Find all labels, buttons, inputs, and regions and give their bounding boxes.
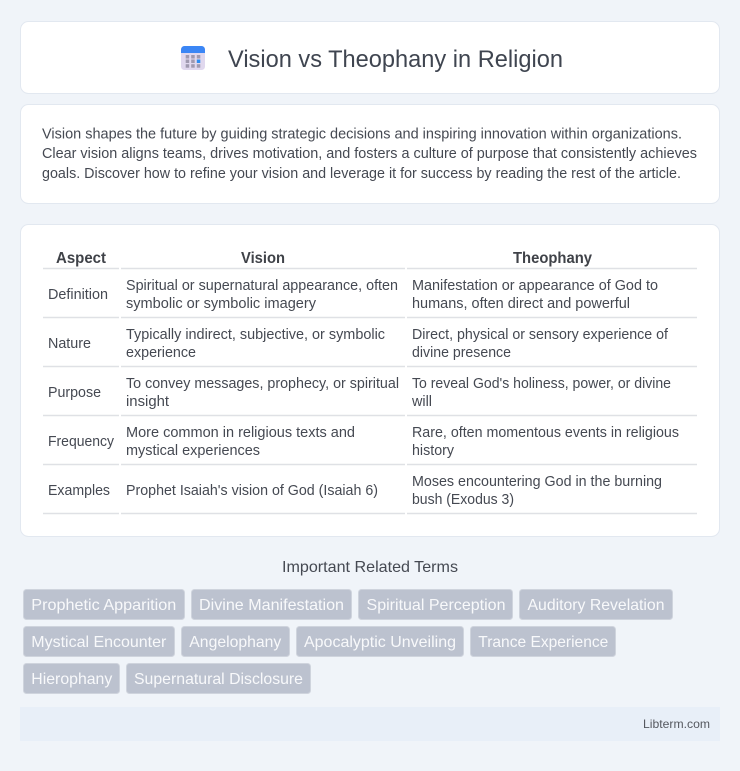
tag: Auditory Revelation xyxy=(520,590,672,620)
panel: introduction text: Clear vision aligns teams, drives motivation, and fosters a culture of purpose that consistently achieves xyxy=(42,146,697,162)
tag: Mystical Encounter xyxy=(24,626,174,656)
row: frequency: Frequency xyxy=(48,434,115,450)
table header row: Aspect xyxy=(56,250,106,267)
row: nature: divine presence xyxy=(412,345,511,361)
tag: Divine Manifestation xyxy=(192,590,352,620)
panel: introduction text: goals. Discover how to refine your vision and leverage it for success by reading the rest of the article. xyxy=(42,166,681,182)
tag: Apocalyptic Unveiling: Apocalyptic Unveiling xyxy=(304,634,456,651)
tag: Hierophany xyxy=(24,664,120,694)
tag: Angelophany xyxy=(182,626,290,656)
title: Vision vs Theophany in Religion xyxy=(228,46,563,73)
heading: important related terms: Important Related Terms xyxy=(282,559,458,576)
row: nature xyxy=(48,327,669,361)
row: definition: symbolic or symbolic imagery xyxy=(126,296,317,312)
row: frequency: mystical experiences xyxy=(126,443,260,459)
row: purpose xyxy=(48,376,671,410)
row: purpose: Purpose xyxy=(48,385,101,401)
row: purpose: To reveal God's holiness, power, or divine xyxy=(412,376,671,392)
tag: Supernatural Disclosure: Supernatural Disclosure xyxy=(134,671,303,688)
row: purpose: will xyxy=(411,394,432,410)
row: nature: Nature xyxy=(48,336,91,352)
row: examples: Prophet Isaiah's vision of God (Isaiah 6) xyxy=(126,483,378,499)
row: definition: Definition xyxy=(48,287,108,303)
row: examples: Moses encountering God in the burning xyxy=(412,474,662,490)
tag: Auditory Revelation: Auditory Revelation xyxy=(528,597,664,614)
tag: Angelophany: Angelophany xyxy=(189,634,282,651)
tag: Spiritual Perception xyxy=(358,590,512,620)
panel: related term tags xyxy=(24,590,672,694)
icon: calendar xyxy=(181,46,205,70)
row: frequency: More common in religious texts and xyxy=(126,425,355,441)
table header row: Theophany xyxy=(513,250,592,267)
tag: Apocalyptic Unveiling xyxy=(296,626,464,656)
footer bar: Libterm.com xyxy=(643,717,710,731)
tag: Trance Experience: Trance Experience xyxy=(478,634,608,651)
panel: introduction text: Vision shapes the future by guiding strategic decisions and inspiring innovation within organizations. xyxy=(42,126,682,142)
row: nature: Typically indirect, subjective, or symbolic xyxy=(126,327,385,343)
row: examples xyxy=(48,474,662,508)
panel: introduction text xyxy=(20,104,720,204)
row: nature: experience xyxy=(126,345,196,361)
table header row xyxy=(56,250,592,267)
row: examples: Examples xyxy=(48,483,110,499)
tag: Prophetic Apparition: Prophetic Apparition xyxy=(31,597,176,614)
row: frequency xyxy=(48,425,679,459)
table header row: Vision xyxy=(241,250,285,267)
row: definition: humans, often direct and powerful xyxy=(412,296,630,312)
row: examples: bush (Exodus 3) xyxy=(412,492,514,508)
row: definition: Manifestation or appearance of God to xyxy=(412,278,658,294)
row: frequency: history xyxy=(412,443,455,459)
row: purpose: insight xyxy=(126,394,169,410)
tag: Hierophany: Hierophany xyxy=(31,671,112,688)
row: definition xyxy=(48,278,658,312)
tag: Supernatural Disclosure xyxy=(126,664,310,694)
tag: Spiritual Perception: Spiritual Perception xyxy=(366,597,506,614)
panel: title header xyxy=(20,22,720,94)
row: definition: Spiritual or supernatural appearance, often xyxy=(126,278,398,294)
tag: Mystical Encounter: Mystical Encounter xyxy=(31,634,166,651)
footer bar xyxy=(20,707,720,741)
row: nature: Direct, physical or sensory experience of xyxy=(412,327,669,343)
tag: Prophetic Apparition xyxy=(24,590,184,620)
row: purpose: To convey messages, prophecy, or spiritual xyxy=(126,376,399,392)
tag: Trance Experience xyxy=(470,626,616,656)
panel: comparison table xyxy=(20,224,720,536)
row: frequency: Rare, often momentous events in religious xyxy=(412,425,679,441)
tag: Divine Manifestation: Divine Manifestation xyxy=(199,597,344,614)
